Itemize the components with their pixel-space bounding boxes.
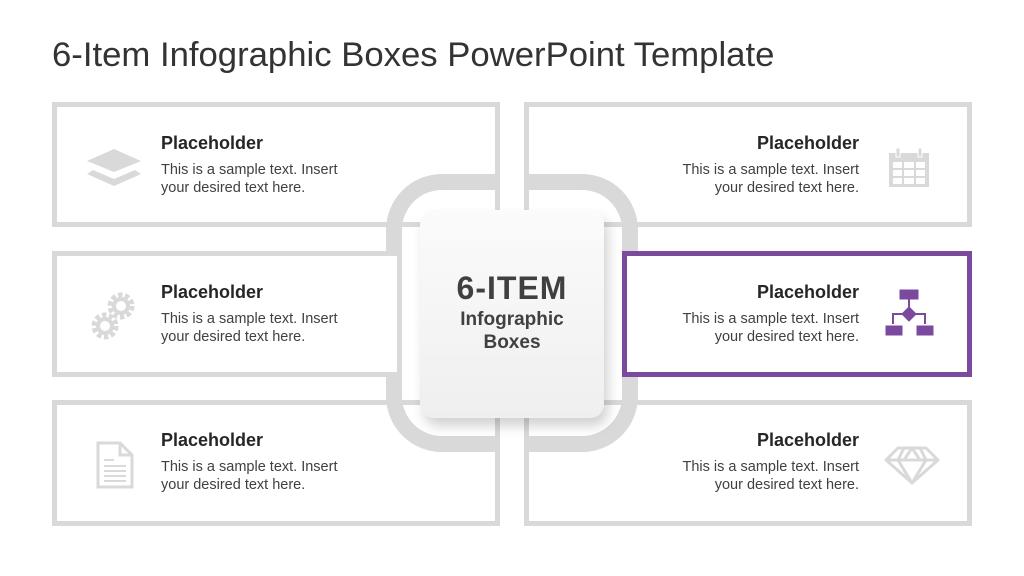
icon: flowchart (886, 290, 934, 336)
text (161, 162, 338, 196)
text (161, 459, 338, 493)
heading: Placeholder (161, 430, 263, 450)
text: your desired text here. (715, 180, 859, 196)
text: This is a sample text. Insert (683, 162, 859, 178)
text (161, 311, 338, 345)
text (682, 162, 859, 196)
card subtitle: Boxes (483, 332, 541, 353)
text (682, 311, 859, 345)
heading: Placeholder (757, 133, 859, 153)
icon: document (96, 442, 134, 488)
heading: Placeholder (161, 282, 263, 302)
text: your desired text here. (161, 180, 305, 196)
heading: Placeholder (757, 430, 859, 450)
icon: diamond (884, 446, 940, 485)
text: This is a sample text. Insert (161, 162, 337, 178)
center card (420, 210, 604, 418)
panel: middle-right (highlighted) (622, 251, 972, 377)
title: 6-Item Infographic Boxes PowerPoint Template (52, 36, 774, 74)
text: This is a sample text. Insert (161, 459, 337, 475)
panel: middle-left (52, 251, 402, 377)
connector ring (386, 174, 638, 452)
panel: bottom-right (524, 400, 972, 526)
panel: top-right (524, 102, 972, 227)
panel: top-left (52, 102, 500, 227)
text: your desired text here. (715, 477, 859, 493)
text: your desired text here. (161, 477, 305, 493)
icon: gears (92, 292, 134, 340)
text (682, 459, 859, 493)
icon: calendar (889, 148, 929, 187)
ring gap (500, 168, 524, 458)
card subtitle: Infographic (460, 309, 564, 330)
text: This is a sample text. Insert (683, 311, 859, 327)
card subtitle (460, 309, 564, 353)
text: This is a sample text. Insert (161, 311, 337, 327)
heading: Placeholder (161, 133, 263, 153)
text: This is a sample text. Insert (683, 459, 859, 475)
heading: Placeholder (757, 282, 859, 302)
text: your desired text here. (161, 329, 305, 345)
panel: bottom-left (52, 400, 500, 526)
text: your desired text here. (715, 329, 859, 345)
icon: layers (87, 149, 141, 186)
card heading: 6-ITEM (457, 270, 567, 306)
